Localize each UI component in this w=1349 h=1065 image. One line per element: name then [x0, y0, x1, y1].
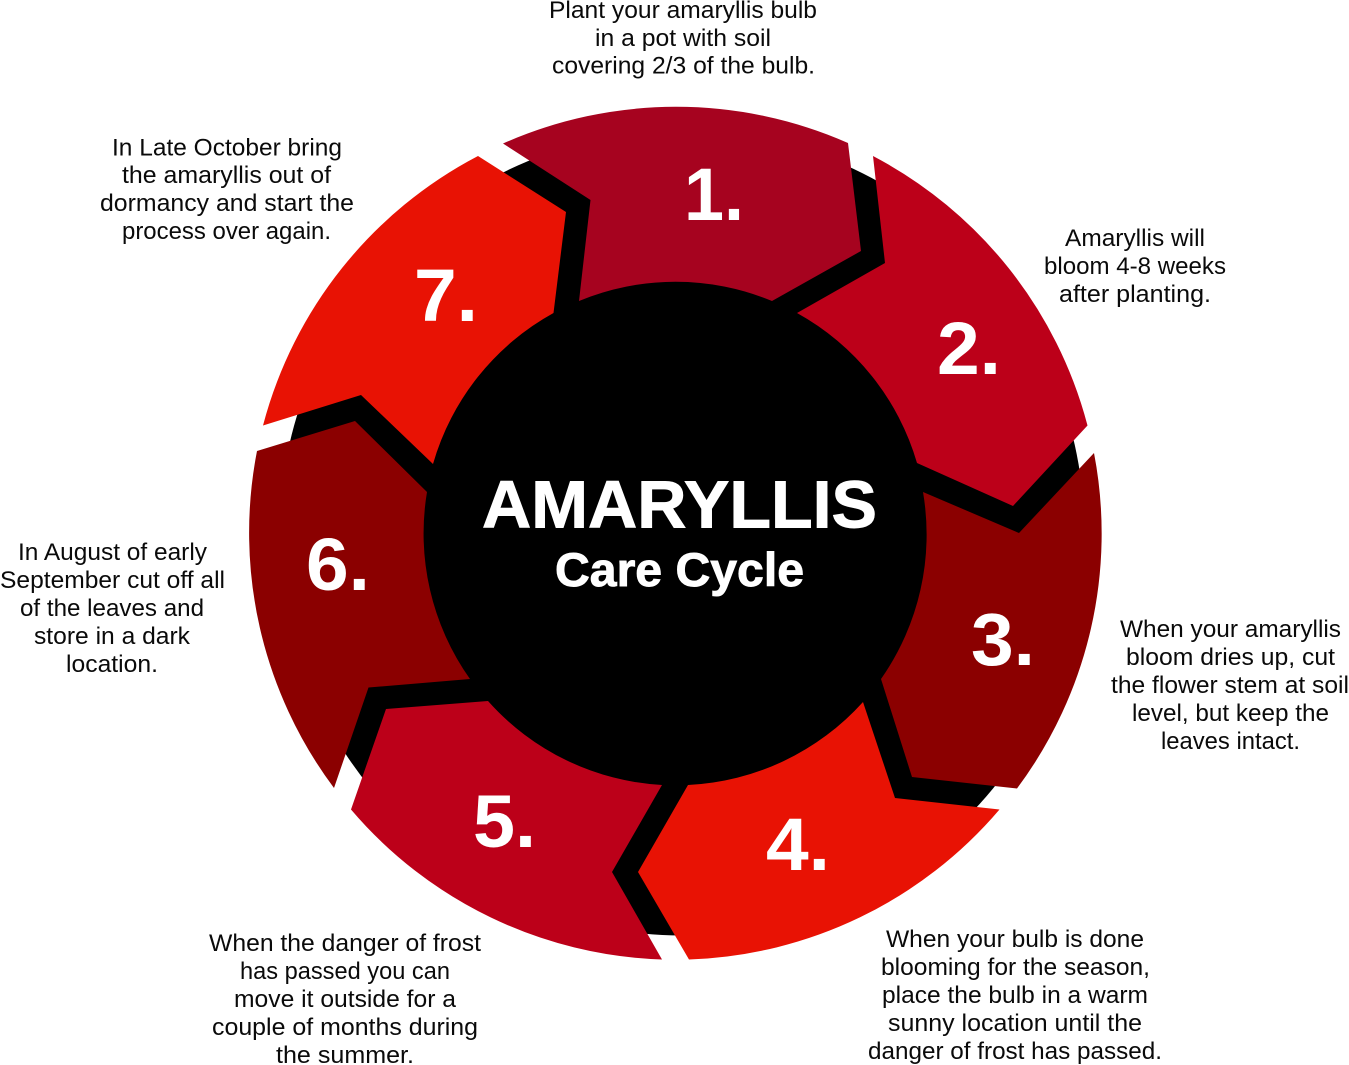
center title: [482, 468, 877, 596]
segment 7: [263, 156, 566, 464]
text: step 6: location.: [66, 651, 158, 678]
text: step 1: [549, 0, 817, 80]
text: step 5: [209, 930, 481, 1065]
text: step 4: place the bulb in a warm: [882, 982, 1148, 1009]
text: step 7: In Late October bring: [112, 134, 342, 162]
text: step 1: in a pot with soil: [595, 25, 771, 52]
text: step 6: of the leaves and: [20, 595, 204, 622]
text: step 3: [1111, 616, 1349, 755]
segment 5: [351, 701, 662, 960]
text: step 2: Amaryllis will: [1065, 225, 1205, 252]
segment 2: 2.: [937, 307, 1001, 390]
segment 1: [503, 107, 861, 301]
black ring behind segments: [280, 130, 1084, 936]
text: step 2: after planting.: [1059, 281, 1211, 308]
segment 6: [249, 421, 470, 788]
segment 4: 4.: [766, 803, 830, 886]
heading: Amaryllis: AMARYLLIS: [482, 468, 877, 542]
text: step 7: [100, 134, 354, 245]
text: step 6: In August of early: [18, 539, 208, 566]
segment 5: 5.: [473, 780, 536, 863]
text: step 3: the flower stem at soil: [1111, 672, 1349, 699]
segment 4: [638, 702, 1000, 960]
text: step 5: move it outside for a: [234, 986, 456, 1013]
segment 3: [881, 453, 1102, 788]
text: step 4: When your bulb is done: [886, 926, 1144, 953]
text: step 2: [1044, 225, 1226, 308]
text: step 4: [868, 926, 1162, 1065]
subheading: Care Cycle: Care Cycle: [555, 543, 804, 596]
text: step 7: process over again.: [122, 218, 331, 245]
segment 3: 3.: [971, 598, 1035, 681]
text: step 4: blooming for the season,: [881, 954, 1150, 981]
text: step 3: bloom dries up, cut: [1126, 644, 1335, 671]
segment 6: 6.: [306, 523, 370, 606]
segment 2: [797, 156, 1088, 506]
text: step 7: the amaryllis out of: [122, 162, 331, 189]
text: step 6: [0, 539, 225, 678]
text: step 2: bloom 4-8 weeks: [1044, 253, 1226, 280]
text: step 7: dormancy and start the: [100, 190, 354, 217]
segment 1: 1.: [684, 153, 744, 236]
text: step 5: has passed you can: [240, 958, 450, 985]
text: step 6: September cut off all: [0, 567, 225, 594]
text: step 3: level, but keep the: [1132, 700, 1329, 727]
text: step 3: leaves intact.: [1161, 728, 1300, 755]
text: step 5: When the danger of frost: [209, 930, 481, 957]
text: step 4: danger of frost has passed.: [868, 1038, 1162, 1065]
text: step 4: sunny location until the: [888, 1010, 1142, 1037]
text: step 5: couple of months during: [212, 1014, 478, 1041]
segment 7: 7.: [414, 254, 478, 337]
text: step 6: store in a dark: [34, 623, 191, 650]
text: step 3: When your amaryllis: [1120, 616, 1341, 643]
text: step 1: covering 2/3 of the bulb.: [552, 52, 815, 80]
